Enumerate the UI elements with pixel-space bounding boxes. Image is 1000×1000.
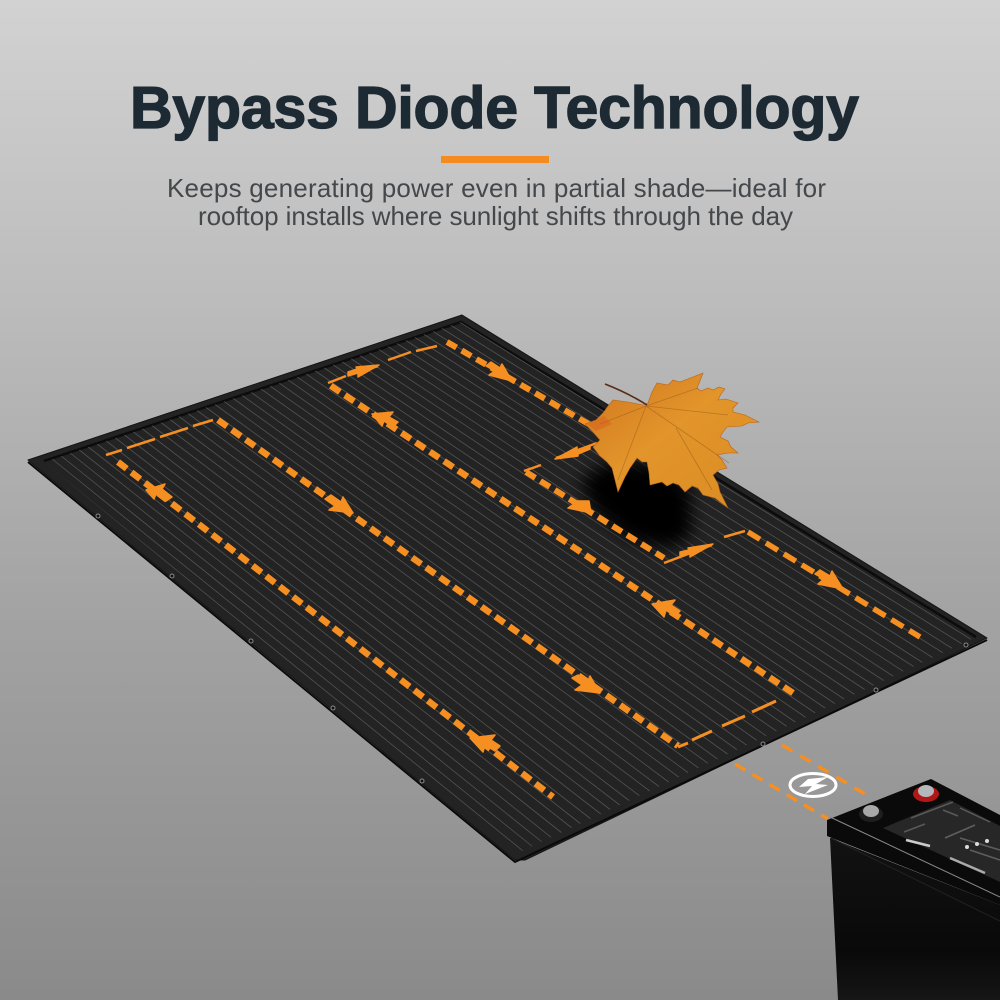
subtitle: rooftop installs where sunlight shifts through the day (198, 201, 793, 231)
panel cell stripes (37, 318, 977, 855)
flow arrowheads (146, 362, 843, 752)
arrow (555, 446, 590, 459)
battery lower edge (831, 838, 1000, 921)
arrow (146, 484, 172, 501)
leaf (585, 373, 759, 508)
battery rim highlight (830, 817, 1000, 897)
title underline (441, 156, 549, 163)
segment: second string (218, 420, 678, 746)
arrow (372, 412, 398, 427)
icon: lightning circle (790, 774, 836, 796)
segment: first string (118, 462, 553, 797)
leaf red tint (587, 416, 612, 431)
segment: third connector (328, 346, 437, 383)
segment: fourth connector under leaf (524, 443, 597, 471)
leaf shadow (580, 462, 692, 548)
battery (827, 779, 1000, 1000)
arrow (652, 600, 680, 617)
segment: fourth string lower (526, 472, 664, 558)
panel frame (28, 315, 987, 860)
subtitle (167, 173, 826, 231)
positive terminal (913, 785, 939, 802)
segment: fourth string upper (447, 342, 592, 426)
arrow (572, 675, 600, 693)
subtitle: Keeps generating power even in partial shade—ideal for (167, 173, 826, 203)
title: Bypass Diode Technology (130, 75, 859, 141)
connection dashed lines (735, 745, 872, 819)
arrow (470, 735, 500, 752)
panel mounting holes (96, 514, 968, 783)
segment: first connector (106, 420, 213, 455)
battery label panel (883, 800, 1000, 882)
solar panel (28, 315, 987, 862)
battery top (827, 779, 1000, 905)
arrow (325, 495, 353, 513)
leaf stem (605, 384, 647, 405)
arrow (680, 544, 713, 557)
arrow (348, 365, 379, 377)
segment: gap connector (664, 531, 745, 563)
arrow (486, 362, 512, 381)
segment: second connector (678, 701, 776, 747)
arrow (568, 501, 591, 513)
leaf blade (585, 373, 759, 508)
leaf veins (600, 388, 729, 490)
negative terminal (859, 805, 883, 822)
current flow path (106, 342, 920, 797)
segment: third string (328, 384, 793, 693)
battery body (830, 838, 1000, 1000)
arrow (815, 570, 843, 589)
segment: final string (748, 532, 920, 637)
